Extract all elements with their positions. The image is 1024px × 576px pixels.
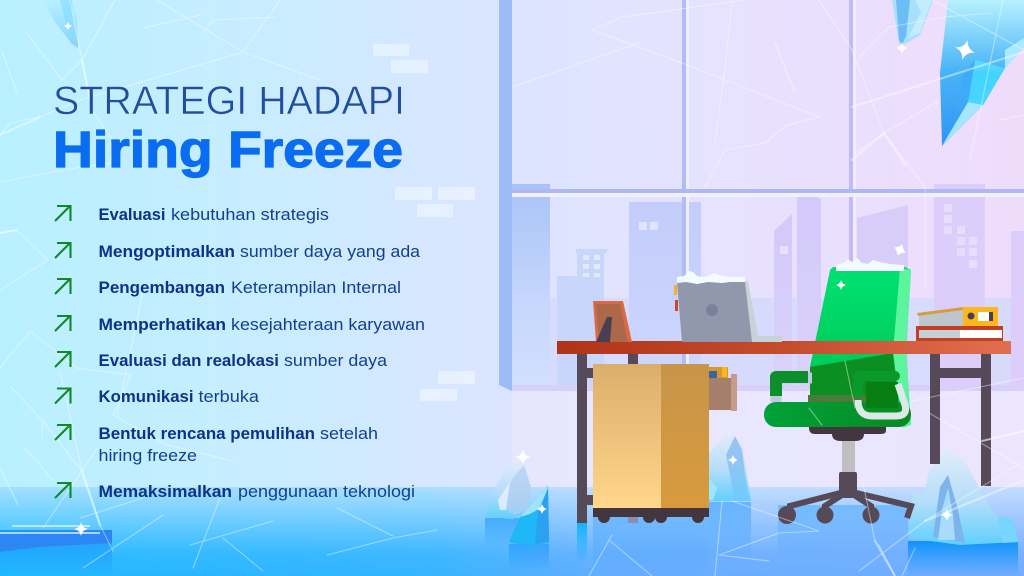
stacked binders — [916, 307, 1003, 341]
desk legs — [577, 354, 991, 523]
ice plate bottom left — [0, 526, 112, 576]
sparkles — [64, 22, 978, 536]
item 4: kesejahteraan karyawan — [231, 315, 425, 334]
item 8 — [55, 482, 415, 501]
item 7 — [55, 424, 378, 465]
item 8: Memaksimalkan — [98, 482, 232, 501]
item 3: Keterampilan Internal — [231, 278, 401, 297]
gas lift — [842, 441, 855, 472]
title line 2: Hiring Freeze — [53, 121, 403, 178]
item 4 — [55, 315, 425, 334]
laptop snow — [677, 271, 745, 284]
armrest green — [776, 377, 808, 396]
item 2: Mengoptimalkan — [98, 242, 235, 261]
item 3 — [55, 278, 401, 297]
item 6: terbuka — [198, 387, 260, 406]
laptop — [674, 271, 782, 342]
title — [53, 79, 405, 178]
window frame — [499, 0, 1024, 487]
item 6: Komunikasi — [98, 387, 194, 406]
casters — [598, 511, 704, 523]
chair back — [810, 267, 911, 425]
back desk leg — [628, 354, 638, 364]
item 5 — [55, 351, 388, 370]
left armrest — [776, 378, 812, 402]
wheel base — [778, 472, 911, 524]
floor reflections — [577, 502, 908, 576]
frozen floor — [0, 487, 1024, 576]
desk — [557, 341, 1011, 523]
window skyline — [512, 184, 1024, 385]
seat shadow — [809, 427, 886, 441]
icicle: small top right — [892, 0, 933, 46]
strategy list — [55, 205, 425, 501]
open drawer — [709, 367, 737, 411]
chair snow — [836, 258, 904, 271]
item 7: Bentuk rencana pemulihan — [98, 424, 315, 443]
iceberg: behind drawer — [709, 431, 751, 501]
item 1 — [55, 205, 329, 224]
title line 1: STRATEGI HADAPI — [53, 79, 405, 123]
item 7: setelah — [320, 424, 378, 443]
floating light blocks — [373, 44, 475, 401]
item 5: Evaluasi dan realokasi — [98, 351, 279, 370]
item 7: hiring freeze — [98, 446, 197, 465]
seat — [764, 402, 911, 427]
item 1: kebutuhan strategis — [171, 205, 329, 224]
item 6 — [55, 387, 260, 406]
desk top — [557, 341, 1011, 354]
iceberg: right — [908, 446, 1018, 576]
office chair — [764, 258, 911, 524]
icicle: top left — [43, 0, 78, 48]
item 2 — [55, 242, 421, 261]
item 2: sumber daya yang ada — [240, 242, 421, 261]
drawer cabinet — [593, 354, 737, 523]
icicle: large top right — [940, 0, 1024, 146]
item 8: penggunaan teknologi — [238, 482, 415, 501]
iceberg: left pair — [485, 458, 549, 572]
item 1: Evaluasi — [98, 205, 166, 224]
item 3: Pengembangan — [98, 278, 225, 297]
item 5: sumber daya — [284, 351, 388, 370]
picture frame — [593, 301, 632, 342]
armrest right — [858, 376, 906, 416]
item 4: Memperhatikan — [98, 315, 226, 334]
